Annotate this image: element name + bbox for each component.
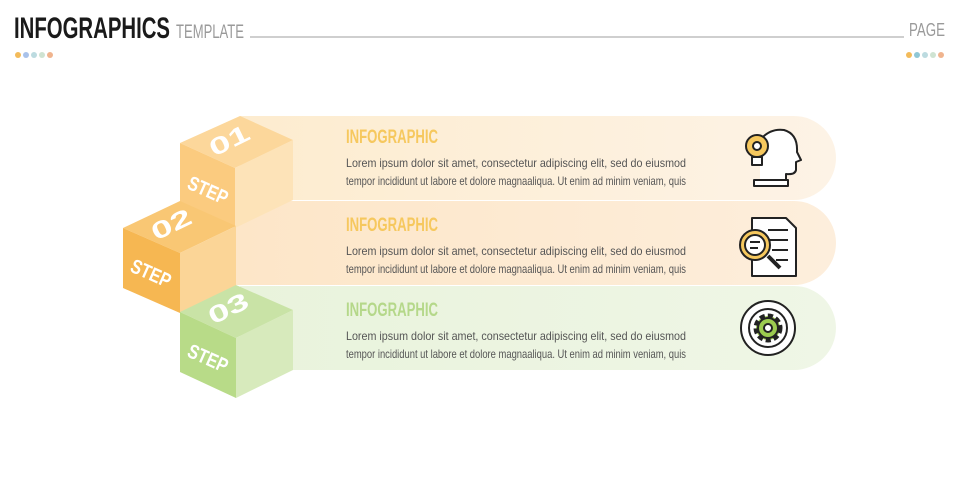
text block 3: Lorem ipsum dolor sit amet, consectetur adipiscing elit, sed do eiusmod <box>346 329 686 343</box>
text block 1 <box>346 127 686 188</box>
header dots <box>15 52 944 58</box>
cube 2: STEP <box>127 255 174 293</box>
text block 2 <box>346 215 686 276</box>
text block 3: INFOGRAPHIC <box>346 300 438 321</box>
text block 2: Lorem ipsum dolor sit amet, consectetur adipiscing elit, sed do eiusmod <box>346 244 686 258</box>
header title: INFOGRAPHICS <box>14 12 170 45</box>
text block 1: INFOGRAPHIC <box>346 127 438 148</box>
cube 1: STEP <box>184 172 231 210</box>
text block 3 <box>346 300 686 361</box>
cube 3: 03 <box>204 288 253 330</box>
band 2 <box>236 201 836 285</box>
text block 2: tempor incididunt ut labore et dolore magnaaliqua. Ut enim ad minim veniam, quis <box>346 262 686 276</box>
header title: TEMPLATE <box>176 22 244 43</box>
cube 1 <box>180 116 293 228</box>
cube 2 <box>123 201 236 313</box>
text block 3: tempor incididunt ut labore et dolore magnaaliqua. Ut enim ad minim veniam, quis <box>346 347 686 361</box>
icon: gear with cycle arrows <box>741 301 795 355</box>
header title: PAGE <box>909 20 945 40</box>
band 1 <box>240 116 836 200</box>
band 3 <box>240 286 836 370</box>
cube 1: 01 <box>205 120 254 162</box>
icon: document with magnifier <box>740 218 796 276</box>
cube 2: 02 <box>147 204 196 246</box>
cube 3: STEP <box>184 340 231 378</box>
text block 1: Lorem ipsum dolor sit amet, consectetur adipiscing elit, sed do eiusmod <box>346 156 686 170</box>
cube 3 <box>180 285 293 398</box>
icon: head with lightbulb <box>746 130 801 186</box>
header title <box>14 12 945 45</box>
text block 1: tempor incididunt ut labore et dolore magnaaliqua. Ut enim ad minim veniam, quis <box>346 174 686 188</box>
text block 2: INFOGRAPHIC <box>346 215 438 236</box>
